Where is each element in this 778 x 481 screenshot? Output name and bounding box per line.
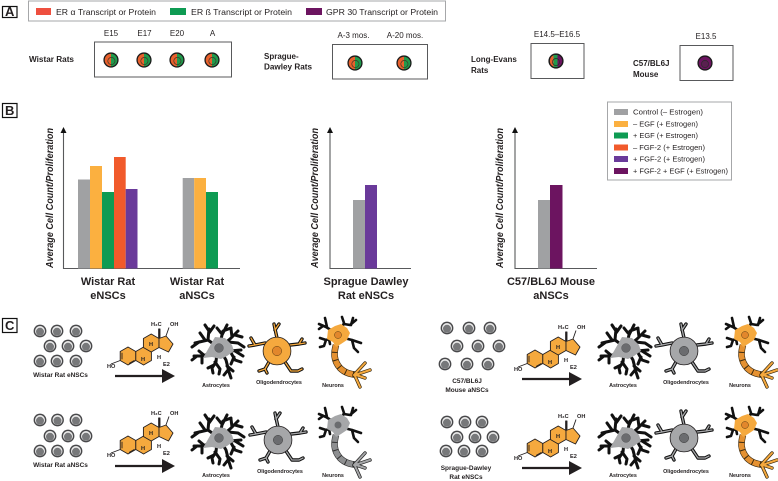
- neuron: Neurons: [322, 473, 344, 479]
- panel A: Sprague-Dawley rats expression: Sprague-: [264, 52, 299, 61]
- oligodendrocyte: [656, 411, 712, 475]
- legend: receptor types: GPR 30 Transcript or Protein: [326, 8, 438, 17]
- bar chart: C57/BL6J Mouse aNSCs: C57/BL6J Mouse: [507, 276, 595, 288]
- estradiol structure: H: [141, 446, 145, 452]
- oligodendrocyte: Oligodendrocytes: [663, 469, 709, 475]
- cell cluster: [33, 414, 92, 469]
- panel A: Long-Evans rats expression: Rats: [471, 66, 489, 75]
- cell cluster: C57/BL6J: [452, 378, 482, 385]
- arrow: [115, 459, 175, 473]
- panel label: A: A: [5, 4, 15, 19]
- panel label: B: B: [5, 103, 14, 118]
- neuron: Neurons: [729, 473, 751, 479]
- astrocyte: [599, 415, 651, 479]
- legend: treatments: – FGF-2 (+ Estrogen): [633, 145, 705, 152]
- panel A: Long-Evans rats expression: E14.5–E16.5: [534, 30, 581, 39]
- estradiol structure: H: [141, 357, 145, 363]
- astrocyte: Astrocytes: [202, 473, 230, 479]
- panel A: Wistar rats expression: Wistar Rats: [29, 55, 75, 64]
- panel A: Long-Evans rats expression: [471, 30, 584, 78]
- cell cluster: Sprague-Dawley: [441, 465, 492, 472]
- estradiol structure: OH: [577, 325, 585, 331]
- oligodendrocyte: [656, 324, 712, 386]
- astrocyte: [599, 325, 651, 389]
- astrocyte: [192, 325, 244, 389]
- icon: purple receptor dot: [697, 55, 713, 71]
- panel A: Wistar rats expression: E17: [137, 29, 152, 38]
- estradiol structure: E2: [570, 365, 577, 371]
- row: Sprague-Dawley Rat eNSCs differentiation: [440, 407, 777, 481]
- arrow: [115, 369, 175, 383]
- arrow: [522, 461, 582, 475]
- panel label: C: C: [5, 318, 15, 333]
- oligodendrocyte: [249, 324, 305, 386]
- estradiol structure: E2: [163, 362, 170, 368]
- estradiol structure: HO: [107, 364, 116, 370]
- estradiol structure: H: [149, 342, 153, 348]
- row: C57/BL6J Mouse aNSCs differentiation: [439, 317, 777, 394]
- neuron: [726, 317, 777, 389]
- panel label: A: [2, 4, 17, 19]
- estradiol structure: H₃C: [558, 325, 569, 331]
- bar chart: Sprague Dawley Rat eNSCs: [310, 127, 411, 302]
- estradiol structure: OH: [577, 414, 585, 420]
- bar chart: Wistar Rat eNSCs and aNSCs: aNSCs: [179, 290, 215, 302]
- icon: tri-colour receptor dot: [548, 53, 564, 69]
- oligodendrocyte: Oligodendrocytes: [256, 380, 302, 386]
- estradiol structure: HO: [514, 456, 523, 462]
- panel A: Wistar rats expression: E15: [104, 29, 119, 38]
- estradiol structure: OH: [170, 411, 178, 417]
- panel A: C57/BL6J mouse expression: C57/BL6J: [633, 59, 669, 68]
- cell cluster: Wistar Rat aNSCs: [33, 462, 88, 469]
- estradiol structure: H₃C: [558, 414, 569, 420]
- estradiol structure: E2: [163, 451, 170, 457]
- panel A: Sprague-Dawley rats expression: [264, 31, 428, 79]
- panel A: Sprague-Dawley rats expression: Dawley Rats: [264, 62, 313, 72]
- cell cluster: Rat eNSCs: [449, 474, 483, 481]
- astrocyte: [192, 415, 244, 479]
- estradiol structure: H: [157, 355, 161, 361]
- astrocyte: Astrocytes: [202, 383, 230, 389]
- legend: treatments: + FGF-2 + EGF (+ Estrogen): [633, 168, 728, 176]
- panel A: Sprague-Dawley rats expression: A-3 mos.: [337, 31, 370, 40]
- oligodendrocyte: Oligodendrocytes: [257, 469, 303, 475]
- estradiol structure: E2: [570, 454, 577, 460]
- panel A: C57/BL6J mouse expression: E13.5: [696, 32, 717, 41]
- estradiol structure: H: [564, 447, 568, 453]
- estradiol structure: [514, 325, 585, 373]
- legend: treatments: Control (– Estrogen): [633, 110, 703, 116]
- row: Wistar Rat aNSCs differentiation: [33, 407, 370, 479]
- legend: receptor types: ER α Transcript or Protein: [56, 8, 156, 17]
- estradiol structure: H: [149, 431, 153, 437]
- panel A: Wistar rats expression: E20: [170, 29, 185, 38]
- cell cluster: [33, 325, 92, 379]
- estradiol structure: H₃C: [151, 322, 162, 328]
- legend: treatments: [608, 102, 732, 180]
- estradiol structure: HO: [514, 367, 523, 373]
- neuron: Neurons: [729, 383, 751, 389]
- legend: treatments: – EGF (+ Estrogen): [633, 122, 698, 128]
- bar chart: Wistar Rat eNSCs and aNSCs: Average Cell Count/Proliferation: [45, 128, 56, 269]
- estradiol structure: H: [157, 444, 161, 450]
- panel A: Wistar rats expression: [29, 29, 232, 77]
- panel A: Wistar rats expression: A: [210, 29, 216, 38]
- legend: receptor types: ER ß Transcript or Protein: [191, 8, 292, 17]
- estradiol structure: H: [548, 449, 552, 455]
- legend: treatments: + EGF (+ Estrogen): [633, 133, 698, 140]
- bar chart: Wistar Rat eNSCs and aNSCs: [45, 127, 240, 302]
- row: Wistar Rat eNSCs differentiation: [33, 317, 370, 389]
- legend: receptor types: [28, 1, 446, 21]
- oligodendrocyte: [250, 413, 306, 475]
- bar chart: Wistar Rat eNSCs and aNSCs: eNSCs: [90, 290, 126, 302]
- panel label: C: [2, 318, 17, 333]
- panel A: C57/BL6J mouse expression: [633, 32, 733, 80]
- arrow: [522, 372, 582, 386]
- estradiol structure: [107, 411, 178, 459]
- bar chart: Sprague Dawley Rat eNSCs: Average Cell Count/Proliferation: [310, 128, 321, 269]
- estradiol structure: H: [556, 345, 560, 351]
- oligodendrocyte: Oligodendrocytes: [663, 380, 709, 386]
- estradiol structure: H: [556, 434, 560, 440]
- panel A: Long-Evans rats expression: Long-Evans: [471, 55, 517, 64]
- estradiol structure: H₃C: [151, 411, 162, 417]
- astrocyte: Astrocytes: [609, 383, 637, 389]
- estradiol structure: HO: [107, 453, 116, 459]
- bar chart: Sprague Dawley Rat eNSCs: Rat eNSCs: [338, 290, 394, 302]
- bar chart: C57/BL6J Mouse aNSCs: [495, 127, 597, 302]
- estradiol structure: H: [564, 358, 568, 364]
- bar chart: Sprague Dawley Rat eNSCs: Sprague Dawley: [324, 276, 409, 288]
- astrocyte: Astrocytes: [609, 473, 637, 479]
- legend: treatments: + FGF-2 (+ Estrogen): [633, 156, 705, 164]
- cell cluster: Mouse aNSCs: [445, 387, 489, 394]
- panel label: B: [2, 103, 17, 118]
- panel A: Sprague-Dawley rats expression: A-20 mos.: [387, 31, 423, 40]
- bar chart: C57/BL6J Mouse aNSCs: aNSCs: [533, 290, 569, 302]
- estradiol structure: [514, 414, 585, 462]
- cell cluster: [440, 416, 499, 481]
- estradiol structure: OH: [170, 322, 178, 328]
- bar chart: Wistar Rat eNSCs and aNSCs: Wistar Rat: [170, 276, 224, 288]
- bar chart: C57/BL6J Mouse aNSCs: Average Cell Count/Proliferation: [495, 128, 506, 269]
- bar chart: Wistar Rat eNSCs and aNSCs: Wistar Rat: [81, 276, 135, 288]
- neuron: [726, 407, 777, 479]
- neuron: Neurons: [322, 383, 344, 389]
- cell cluster: Wistar Rat eNSCs: [33, 372, 88, 379]
- cell cluster: [439, 322, 505, 394]
- estradiol structure: [107, 322, 178, 370]
- panel A: C57/BL6J mouse expression: Mouse: [633, 70, 659, 79]
- neuron: [319, 317, 370, 389]
- neuron: [319, 407, 370, 479]
- estradiol structure: H: [548, 360, 552, 366]
